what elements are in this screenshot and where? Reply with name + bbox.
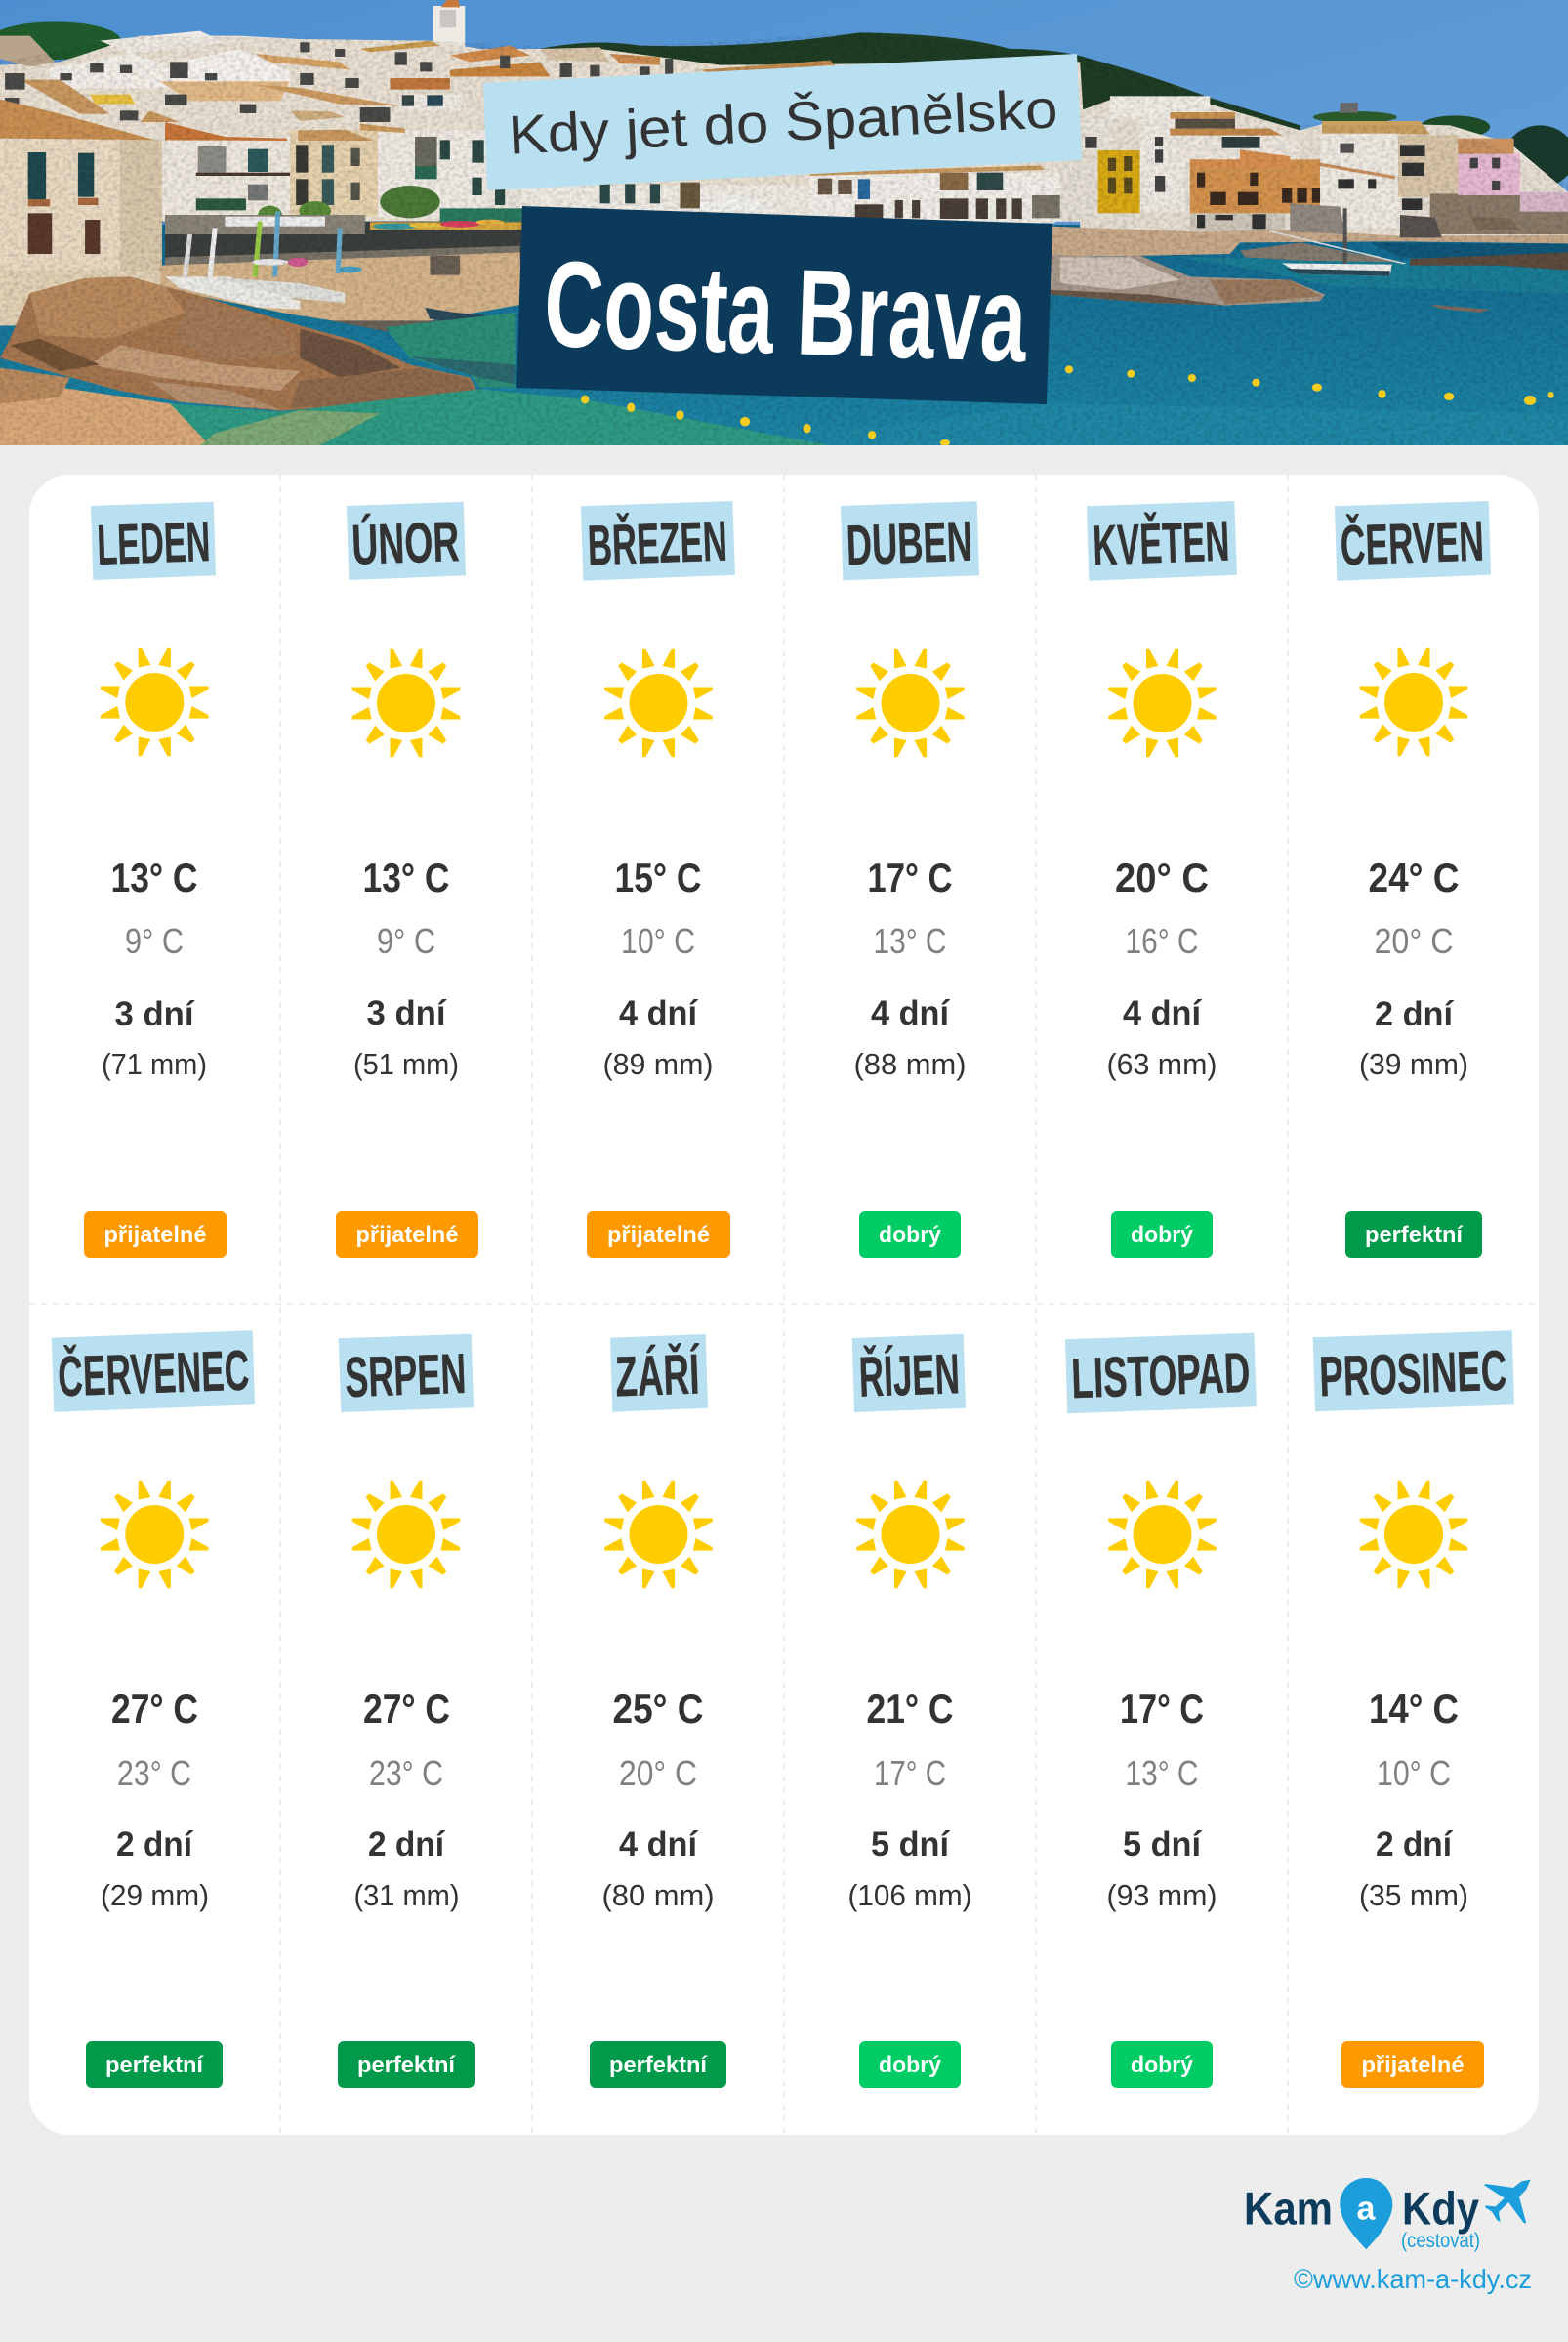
rating badge: dobrý xyxy=(879,2052,942,2078)
high temperature: 14° C xyxy=(1369,1686,1459,1732)
rainy days: 3 dní xyxy=(367,994,447,1032)
heading xyxy=(339,1334,474,1412)
icon: sun xyxy=(857,649,965,757)
precipitation: (88 mm) xyxy=(853,1047,967,1081)
logo: Kam a Kdy xyxy=(1244,2178,1531,2252)
icon: sun xyxy=(101,1481,208,1588)
high temperature: 17° C xyxy=(1120,1686,1204,1732)
heading xyxy=(1087,501,1237,581)
heading: ČERVENEC xyxy=(57,1339,250,1408)
precipitation: (106 mm) xyxy=(847,1878,972,1912)
high temperature: 17° C xyxy=(867,855,953,900)
heading xyxy=(91,502,216,580)
icon: sun xyxy=(1360,648,1467,756)
high temperature: 21° C xyxy=(867,1686,953,1732)
high temperature: 24° C xyxy=(1369,855,1459,900)
month: září xyxy=(590,1334,726,2088)
rating badge: dobrý xyxy=(1131,2052,1194,2078)
header photo: Costa Brava bay xyxy=(0,0,1568,446)
rainy days: 4 dní xyxy=(619,1825,698,1863)
heading: KVĚTEN xyxy=(1092,510,1230,577)
low temperature: 13° C xyxy=(1125,1753,1199,1793)
heading xyxy=(581,501,735,581)
month: listopad xyxy=(1065,1333,1257,2088)
rainy days: 4 dní xyxy=(619,994,698,1032)
high temperature: 20° C xyxy=(1115,855,1209,900)
rating badge xyxy=(336,1211,478,1258)
rainy days: 5 dní xyxy=(871,1825,950,1863)
logo word: Kdy: Kdy xyxy=(1402,2182,1479,2234)
rating badge xyxy=(590,2041,726,2088)
rating badge: přijatelné xyxy=(1361,2052,1465,2078)
month: červen xyxy=(1335,501,1491,1258)
rating badge: přijatelné xyxy=(103,1222,207,1248)
rainy days: 2 dní xyxy=(116,1825,193,1863)
rating badge xyxy=(84,1211,227,1258)
rating badge: perfektní xyxy=(609,2052,708,2078)
precipitation: (80 mm) xyxy=(601,1878,715,1912)
icon: map pin with letter a: a xyxy=(1357,2191,1377,2228)
month: březen xyxy=(581,501,735,1258)
rating badge xyxy=(1341,2041,1484,2088)
title banner: Costa Brava xyxy=(516,206,1052,404)
title banner: Costa Brava: Costa Brava xyxy=(542,236,1030,388)
icon: sun xyxy=(605,649,713,757)
low temperature: 23° C xyxy=(369,1753,443,1793)
rating badge xyxy=(1345,1211,1482,1258)
month: říjen xyxy=(847,1334,972,2088)
low temperature: 16° C xyxy=(1125,921,1199,961)
low temperature: 13° C xyxy=(873,921,947,961)
rating badge: dobrý xyxy=(1131,1222,1194,1248)
high temperature: 13° C xyxy=(111,855,197,900)
precipitation: (63 mm) xyxy=(1107,1047,1217,1081)
rating badge xyxy=(86,2041,223,2088)
low temperature: 10° C xyxy=(1377,1753,1451,1793)
heading: SRPEN xyxy=(344,1342,467,1409)
panel: climate table card xyxy=(29,475,1539,2135)
icon: sun xyxy=(857,1481,965,1588)
heading: DUBEN xyxy=(846,510,973,577)
heading xyxy=(610,1334,708,1412)
rating badge xyxy=(338,2041,475,2088)
rating badge xyxy=(587,1211,730,1258)
rating badge xyxy=(1111,2041,1213,2088)
precipitation: (29 mm) xyxy=(101,1878,209,1912)
month: červenec xyxy=(52,1330,255,2088)
icon: sun xyxy=(1360,1481,1467,1588)
rating badge xyxy=(859,1211,961,1258)
rating badge: přijatelné xyxy=(607,1222,710,1248)
heading: LEDEN xyxy=(96,510,211,577)
heading xyxy=(1065,1333,1257,1413)
heading: ŘÍJEN xyxy=(858,1342,961,1409)
icon: sun xyxy=(1109,1481,1217,1588)
low temperature: 9° C xyxy=(125,921,184,961)
month: únor xyxy=(336,502,478,1258)
icon: sun xyxy=(1109,649,1217,757)
precipitation: (39 mm) xyxy=(1359,1047,1468,1081)
heading xyxy=(1335,501,1491,581)
month: duben xyxy=(841,501,979,1258)
rainy days: 5 dní xyxy=(1123,1825,1202,1863)
title banner: Kdy jet do Španělsko xyxy=(483,54,1082,190)
low temperature: 17° C xyxy=(874,1753,946,1793)
high temperature: 13° C xyxy=(363,855,449,900)
rainy days: 2 dní xyxy=(368,1825,445,1863)
low temperature: 20° C xyxy=(619,1753,697,1793)
rating badge: dobrý xyxy=(879,1222,942,1248)
rainy days: 4 dní xyxy=(1123,994,1202,1032)
month: květen xyxy=(1087,501,1237,1258)
logo sub-label: (cestovat) xyxy=(1401,2230,1480,2252)
month: srpen xyxy=(338,1334,475,2088)
high temperature: 25° C xyxy=(613,1686,703,1732)
rating badge: perfektní xyxy=(105,2052,204,2078)
rating badge: perfektní xyxy=(357,2052,456,2078)
rating badge: přijatelné xyxy=(355,1222,459,1248)
precipitation: (31 mm) xyxy=(353,1878,459,1912)
low temperature: 20° C xyxy=(1375,921,1453,961)
heading xyxy=(852,1334,966,1412)
icon: sun xyxy=(352,649,460,757)
icon: sun xyxy=(101,648,208,756)
high temperature: 15° C xyxy=(615,855,701,900)
month: prosinec xyxy=(1313,1330,1514,2088)
precipitation: (89 mm) xyxy=(603,1047,713,1081)
heading xyxy=(52,1330,255,1412)
low temperature: 10° C xyxy=(621,921,695,961)
rating badge xyxy=(1111,1211,1213,1258)
logo word: Kam: Kam xyxy=(1244,2182,1333,2234)
heading: ZÁŘÍ xyxy=(614,1342,702,1408)
month: leden xyxy=(84,502,227,1258)
rainy days: 4 dní xyxy=(871,994,950,1032)
precipitation: (51 mm) xyxy=(353,1047,459,1081)
title banner: Kdy jet do Španělsko: Kdy jet do Španělsko xyxy=(507,77,1059,166)
heading xyxy=(347,502,466,580)
rating badge xyxy=(859,2041,961,2088)
low temperature: 9° C xyxy=(377,921,435,961)
high temperature: 27° C xyxy=(363,1686,450,1732)
website credit: ©www.kam-a-kdy.cz xyxy=(1294,2264,1532,2294)
icon: sun xyxy=(605,1481,713,1588)
precipitation: (71 mm) xyxy=(102,1047,207,1081)
low temperature: 23° C xyxy=(117,1753,191,1793)
high temperature: 27° C xyxy=(111,1686,198,1732)
icon: sun xyxy=(352,1481,460,1588)
heading: LISTOPAD xyxy=(1070,1341,1251,1410)
precipitation: (35 mm) xyxy=(1359,1878,1468,1912)
rating badge: perfektní xyxy=(1365,1222,1464,1248)
heading: BŘEZEN xyxy=(587,510,728,577)
rainy days: 2 dní xyxy=(1376,1825,1453,1863)
heading xyxy=(841,501,979,580)
icon: airplane xyxy=(1484,2180,1531,2224)
heading: ÚNOR xyxy=(351,510,460,577)
precipitation: (93 mm) xyxy=(1107,1878,1217,1912)
rainy days: 2 dní xyxy=(1375,995,1454,1033)
rainy days: 3 dní xyxy=(115,995,195,1033)
icon: map pin with letter a xyxy=(1340,2178,1392,2249)
